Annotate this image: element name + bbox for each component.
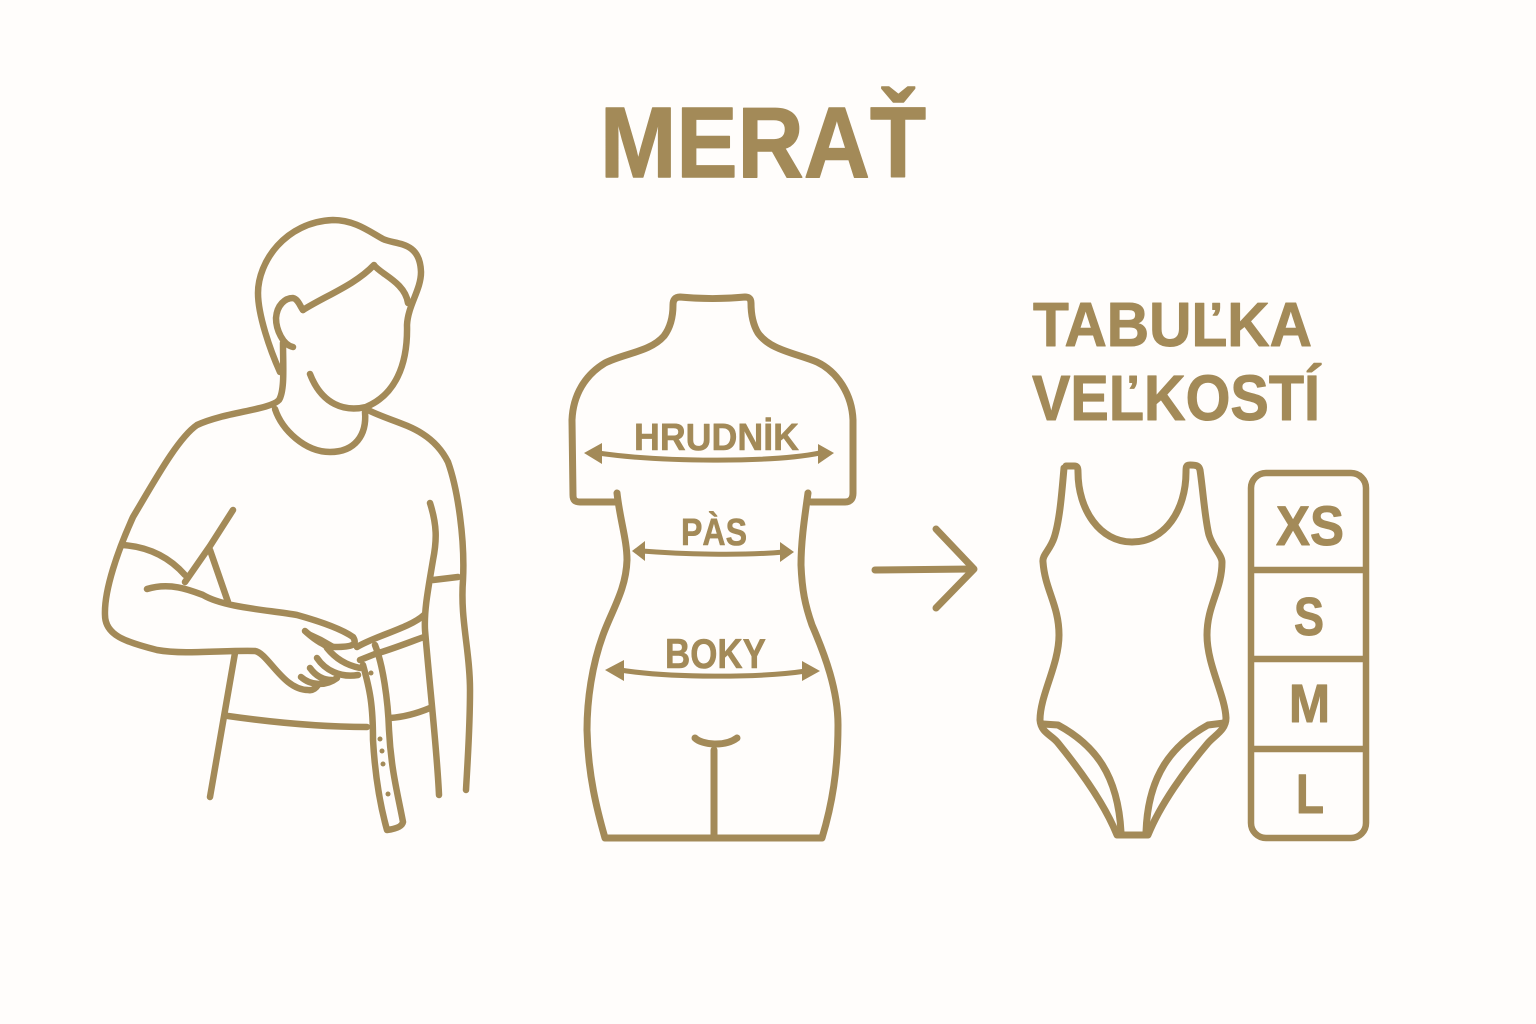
- row dividers: [1252, 570, 1365, 749]
- left sleeve hem: [123, 545, 185, 575]
- right leg opening: [1146, 723, 1224, 832]
- size chart frame: [1251, 473, 1366, 838]
- finger 3: [301, 677, 337, 684]
- title: MERAŤ: [600, 87, 926, 199]
- crotch: [695, 738, 737, 744]
- size XS: XS: [1276, 494, 1344, 557]
- hairline: [303, 265, 408, 310]
- right sleeve hem: [433, 577, 458, 580]
- right torso line: [425, 503, 439, 795]
- waist arrow: [632, 541, 794, 562]
- left torso line: [210, 653, 235, 797]
- size chart: [1251, 473, 1366, 838]
- waist hem right: [390, 708, 430, 718]
- tape band upper: [357, 615, 424, 647]
- finger 2: [310, 668, 332, 680]
- arrow: to size chart: [875, 529, 974, 608]
- swimsuit outline: [1040, 465, 1226, 835]
- right shoulder and outer sleeve: [368, 410, 470, 790]
- inseam: [710, 750, 718, 836]
- tape band lower: [360, 637, 424, 660]
- hips arrow: [605, 660, 820, 681]
- measuring tape: [363, 645, 403, 830]
- tape dots: [368, 670, 390, 796]
- left leg opening: [1043, 724, 1121, 832]
- illustration: swimsuit: [1040, 465, 1226, 835]
- label: waist: PÀS: [681, 510, 747, 554]
- head and hair outline: [258, 220, 421, 408]
- heading: size chart line 1: TABUĽKA: [1033, 291, 1312, 360]
- label: chest: HRUDNİK: [634, 417, 800, 459]
- illustration: person measuring waist: [105, 220, 470, 830]
- forearm top and thumb: [147, 586, 355, 647]
- chest arrow: [584, 443, 834, 464]
- size S: S: [1294, 587, 1324, 647]
- finger 1: [317, 658, 358, 676]
- size M: M: [1289, 674, 1330, 734]
- heading: size chart line 2: VEĽKOSTÍ: [1032, 362, 1322, 434]
- mannequin outline: [572, 297, 853, 838]
- waist hem left: [228, 716, 367, 727]
- thumb fill: [305, 629, 336, 650]
- ear: [276, 298, 303, 347]
- size L: L: [1296, 762, 1324, 825]
- underarm crease: [210, 550, 228, 602]
- hand: [327, 648, 360, 668]
- illustration: mannequin: [572, 297, 853, 838]
- collar: [275, 409, 365, 452]
- neck and left shoulder: [105, 343, 318, 690]
- inner arm crease: [185, 510, 233, 582]
- label: hips: BOKY: [665, 630, 766, 677]
